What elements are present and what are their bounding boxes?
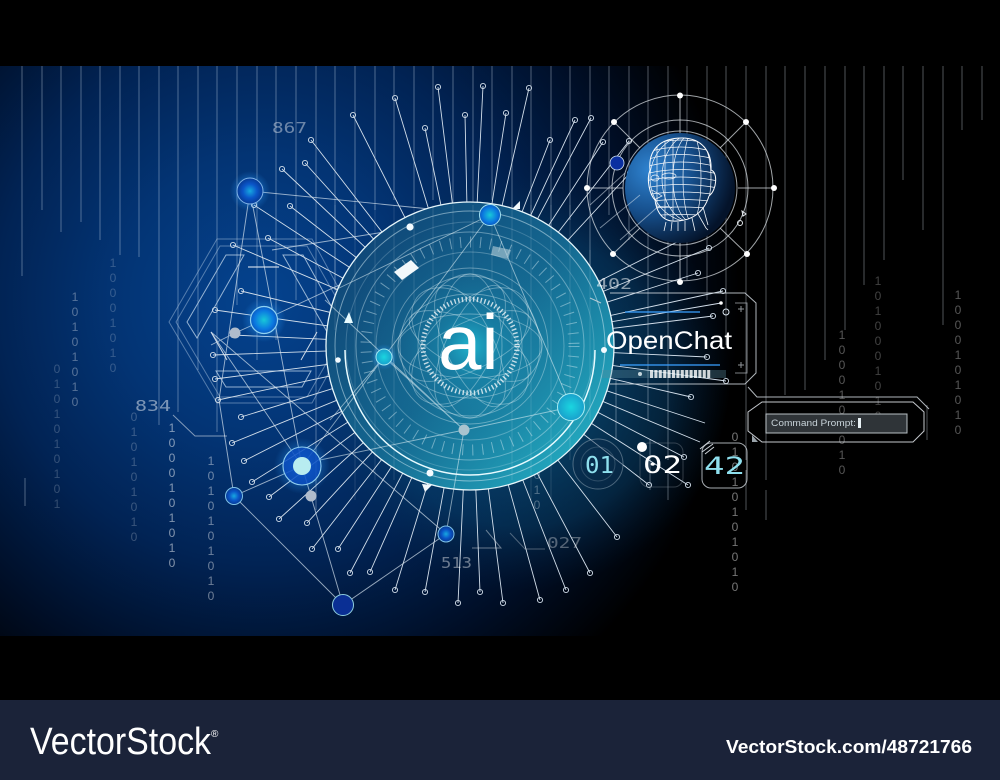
OpenChat title: OpenChat	[606, 327, 732, 355]
label 834 with leader	[135, 397, 227, 436]
label 027 with leader: 027	[547, 534, 582, 552]
binary columns: 1010001010	[871, 274, 885, 424]
face scanner	[584, 92, 777, 285]
cursor	[858, 418, 861, 428]
panel frame	[590, 293, 756, 384]
node: top of disc	[480, 204, 500, 226]
network lines over disc	[302, 215, 571, 534]
face wireframe head	[648, 138, 716, 232]
node: left of disc	[371, 344, 397, 370]
radial spokes with end dots	[210, 83, 729, 606]
counter 02	[637, 442, 683, 487]
wire sphere	[391, 267, 549, 425]
command prompt panel	[748, 387, 929, 442]
top black band	[0, 0, 1000, 66]
translucent data lines over disc	[335, 205, 590, 500]
node: large glowing	[274, 438, 330, 494]
binary columns	[50, 256, 965, 604]
panel spokes endpoints	[638, 301, 729, 376]
face orbit white dots	[584, 92, 777, 285]
label 834 with leader: 834	[135, 397, 171, 415]
small white dots	[335, 223, 607, 476]
label 402: 402	[596, 275, 632, 293]
triangle bottom	[422, 484, 432, 492]
grey marker	[491, 246, 511, 259]
prompt frame	[748, 402, 924, 442]
left hexagon HUD frame	[169, 239, 357, 403]
counter 01	[573, 439, 623, 489]
binary columns: 010101010	[127, 410, 141, 545]
label 867: 867	[272, 119, 307, 137]
arrow head left	[344, 312, 353, 323]
binary columns: 1010101010	[204, 454, 218, 604]
node network connections	[211, 191, 490, 605]
binary columns: 0101010101	[50, 362, 64, 512]
label 513 with leader: 513	[441, 554, 472, 572]
OpenChat HUD panel	[590, 293, 756, 384]
triangle top	[512, 201, 520, 209]
label 027 with leader	[510, 533, 582, 552]
central AI disc	[302, 201, 614, 534]
node: grey lower	[306, 490, 316, 502]
node: grey left	[230, 328, 240, 338]
counter 42: 42	[704, 452, 745, 480]
label 513 with leader	[441, 530, 501, 572]
disc halo	[310, 170, 730, 590]
footer bar	[0, 700, 1000, 780]
binary columns: 1000101010	[951, 288, 965, 438]
footer logo: VectorStock	[30, 721, 212, 763]
node: blue upper left	[230, 171, 270, 211]
binary columns: 1000101010	[165, 421, 179, 571]
main blue background	[0, 66, 1000, 636]
top bracket	[748, 387, 929, 409]
face disc	[625, 133, 735, 243]
spokes over face disc	[590, 173, 660, 240]
prompt text: Command Prompt:	[771, 418, 856, 429]
dark blue node	[610, 156, 624, 170]
node: bottom of disc	[438, 526, 454, 542]
binary columns: 01010101010	[728, 430, 742, 595]
counter 42	[700, 441, 747, 488]
progress bar	[602, 370, 726, 378]
blue glow lines	[620, 312, 720, 365]
registered mark: ®	[211, 729, 219, 740]
grey node	[458, 424, 470, 436]
counter 02: 02	[643, 451, 682, 479]
disc rings	[335, 211, 605, 481]
input field	[766, 414, 907, 433]
disc outer edge	[326, 202, 614, 490]
binary columns: 10101010	[68, 290, 82, 410]
vertical data lines	[22, 66, 982, 520]
node: blue mid left	[242, 298, 286, 342]
node: bottom blue	[332, 594, 354, 616]
disc body	[326, 202, 614, 490]
node: bright right of disc	[558, 394, 584, 420]
counter 01: 01	[585, 453, 614, 479]
binary columns: 1000101010	[835, 328, 849, 478]
white marker diamond	[394, 260, 419, 280]
binary columns: 10001010	[106, 256, 120, 376]
ai logo text: ai	[438, 298, 499, 386]
footer url: VectorStock.com/48721766	[726, 736, 972, 757]
neck	[664, 207, 708, 231]
dotted ring	[423, 299, 517, 393]
face orbit rings	[587, 95, 773, 282]
node: small blue lower left	[226, 488, 242, 504]
bottom black band	[0, 636, 1000, 700]
face ring small marks	[738, 211, 746, 226]
binary columns: 000101010	[530, 378, 544, 513]
